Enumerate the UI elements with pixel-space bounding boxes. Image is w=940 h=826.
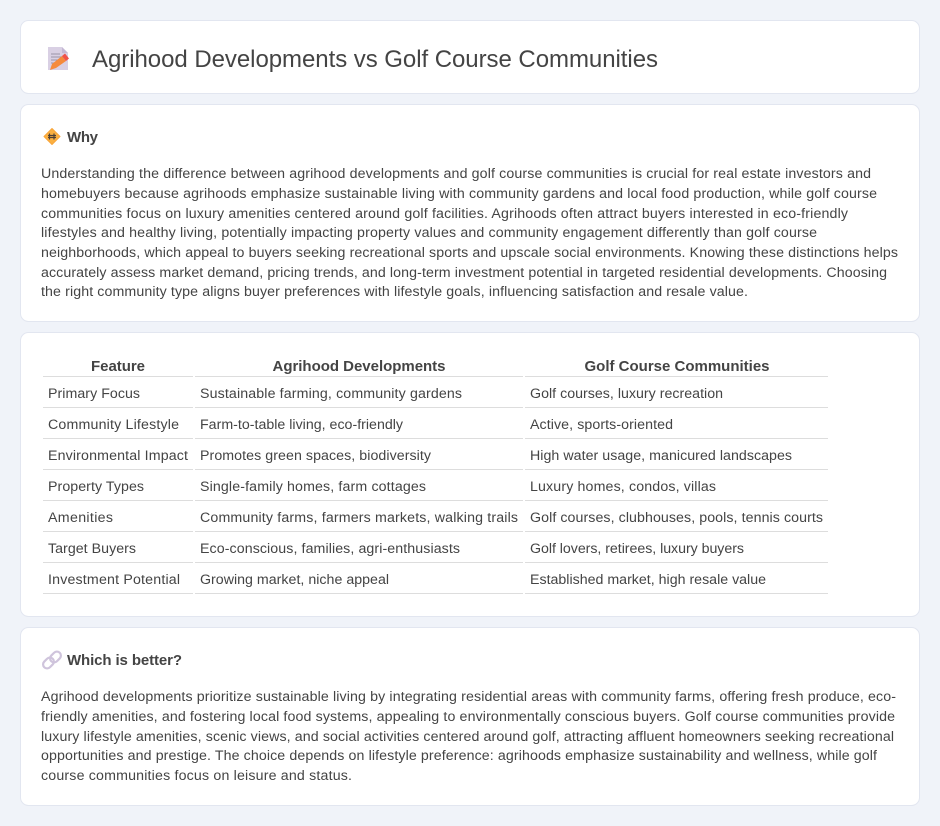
icon: warning diamond — [44, 128, 60, 144]
text block: why: accurately assess market demand, pricing trends, and long-term investment potential in targeted residential developments. Choosing — [41, 265, 887, 281]
table rows: Primary Focus — [48, 386, 140, 402]
table rows: Golf lovers, retirees, luxury buyers — [530, 541, 744, 557]
icon: document with pencil — [48, 47, 69, 70]
text block: which is better: opportunities and prestige. The choice depends on lifestyle preference: agrihoods emphasize sustainability and wellness, while golf — [41, 748, 877, 764]
table rows: Amenities — [48, 510, 113, 526]
table rows: Community farms, farmers markets, walking trails — [200, 510, 518, 526]
text block: why: homebuyers because agrihoods emphasize sustainable living with community gardens and local food production, while golf course — [41, 186, 877, 202]
table rows: Single-family homes, farm cottages — [200, 479, 426, 495]
title: Agrihood Developments vs Golf Course Communities — [92, 46, 658, 73]
table rows: Community Lifestyle — [48, 417, 179, 433]
text block: why: the right community type aligns buyer preferences with lifestyle goals, influencing satisfaction and resale value. — [41, 284, 748, 300]
table rows — [43, 386, 828, 594]
table rows: Active, sports-oriented — [530, 417, 673, 433]
table rows: Growing market, niche appeal — [200, 572, 389, 588]
table rows: High water usage, manicured landscapes — [530, 448, 792, 464]
text block: which is better: Agrihood developments prioritize sustainable living by integrating residential areas with community farms, offering fresh produce, eco- — [41, 689, 896, 705]
panel: header — [20, 20, 920, 94]
panel: which is better — [20, 628, 920, 806]
table rows: Sustainable farming, community gardens — [200, 386, 462, 402]
table rows: Property Types — [48, 479, 144, 495]
panel: why — [20, 104, 920, 322]
table rows: Target Buyers — [48, 541, 136, 557]
table rows: Established market, high resale value — [530, 572, 766, 588]
table rows: Golf courses, clubhouses, pools, tennis courts — [530, 510, 823, 526]
text block: why: Understanding the difference between agrihood developments and golf course communities is crucial for real estate investors and — [41, 166, 871, 182]
text block: why: lifestyles and healthy living, potentially impacting property values and community engagement differently than golf course — [41, 225, 817, 241]
table header — [43, 358, 828, 376]
table rows: Promotes green spaces, biodiversity — [200, 448, 432, 464]
table rows: Farm-to-table living, eco-friendly — [200, 417, 404, 433]
table rows: Environmental Impact — [48, 448, 188, 464]
table rows: Golf courses, luxury recreation — [530, 386, 723, 402]
heading: why: Why — [67, 129, 99, 146]
text block: why: neighborhoods, which appeal to buyers seeking recreational sports and upscale social environments. Knowing these distinctions helps — [41, 245, 898, 261]
text block: which is better: luxury lifestyle amenities, scenic views, and social activities centered around golf, attracting affluent homeowners seeking recreational — [41, 729, 894, 745]
table rows: Investment Potential — [48, 572, 180, 588]
icon: chain link — [41, 650, 63, 670]
table header: Agrihood Developments — [272, 358, 446, 375]
table rows: Eco-conscious, families, agri-enthusiasts — [200, 541, 460, 557]
table rows: Luxury homes, condos, villas — [530, 479, 716, 495]
heading: which is better: Which is better? — [67, 652, 182, 669]
text block: which is better: friendly amenities, and fostering local food systems, appealing to environmentally conscious buyers. Golf course communities provide — [41, 709, 895, 725]
text block: which is better — [41, 689, 896, 784]
text block: why — [41, 166, 898, 300]
table header: Golf Course Communities — [584, 358, 770, 375]
table header: Feature — [91, 358, 145, 375]
text block: which is better: course communities focus on leisure and status. — [41, 768, 352, 784]
panel: comparison table — [20, 332, 920, 616]
text block: why: communities focus on luxury amenities centered around golf facilities. Agrihoods often attract buyers interested in eco-friendly — [41, 206, 849, 222]
